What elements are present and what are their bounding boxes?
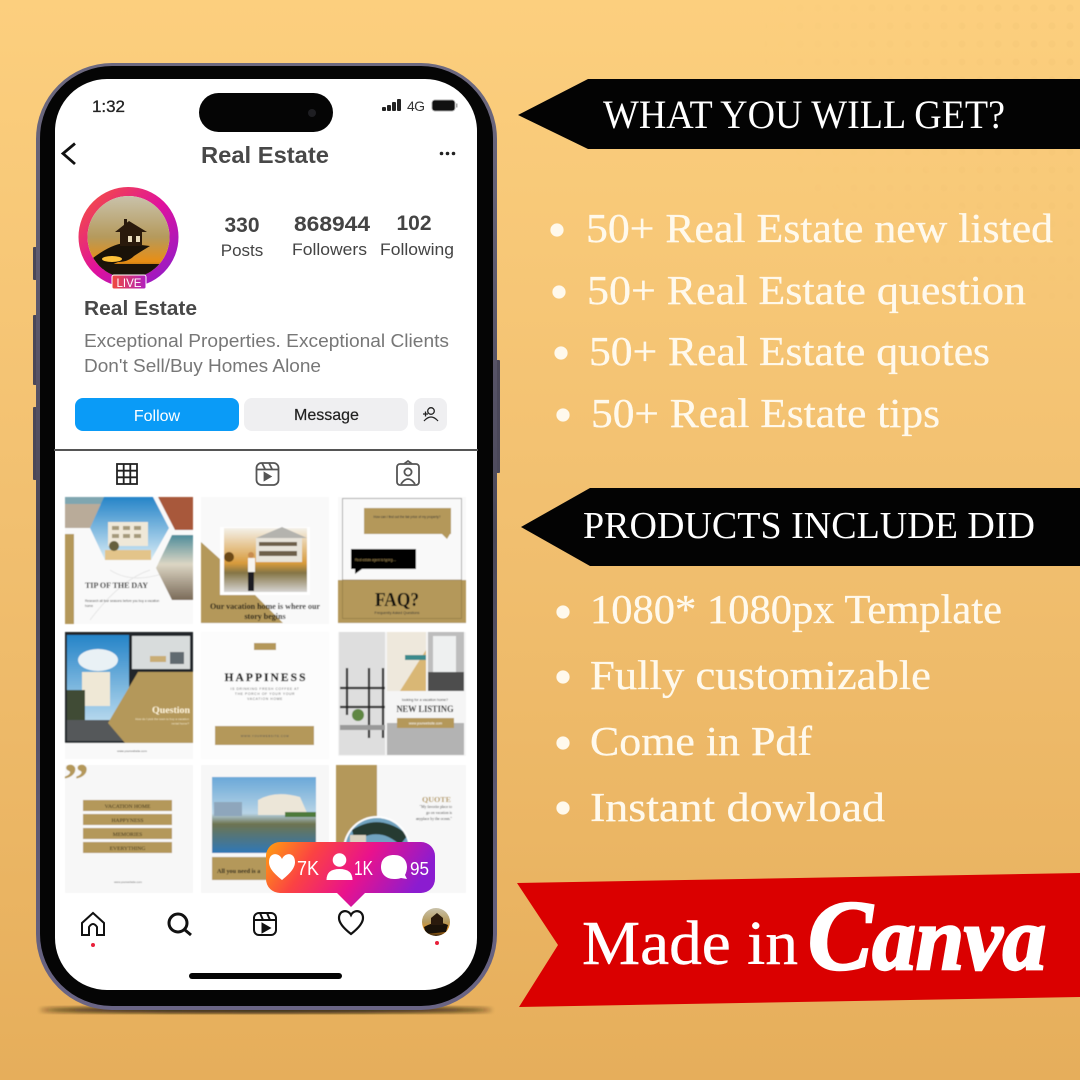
profile buttons: Message xyxy=(294,407,359,424)
post 4: question: rental home? xyxy=(171,722,189,726)
post 1: tip of the day xyxy=(65,497,193,624)
phone xyxy=(33,63,500,1014)
profile stats: 330 xyxy=(224,214,260,237)
post 2: vacation home xyxy=(201,497,329,624)
post 1: tip of the day: home xyxy=(85,604,93,608)
profile stats: Following xyxy=(380,240,454,259)
profile buttons: Follow xyxy=(134,408,181,425)
banner: what you will get: WHAT YOU WILL GET? xyxy=(603,92,1005,137)
banner: products include xyxy=(521,488,1080,566)
profile header: Real Estate xyxy=(201,142,329,168)
post 3: FAQ: FAQ? xyxy=(375,589,419,611)
signal icon xyxy=(382,99,401,111)
icon: heart xyxy=(269,854,295,880)
bottom navigation xyxy=(82,908,450,947)
notification popup: 7K xyxy=(297,858,320,880)
post 5: happiness: WWW.YOURWEBSITE.COM xyxy=(241,734,289,738)
post 6: new listing: www.yourwebsite.com xyxy=(409,722,442,726)
item 4: 50+ Real Estate tips xyxy=(591,390,940,436)
ribbon: made in canva xyxy=(517,873,1080,1007)
icon: reels xyxy=(254,913,276,935)
dynamic island xyxy=(199,93,333,132)
profile buttons xyxy=(75,398,447,431)
tab icons xyxy=(117,461,419,485)
post 3: FAQ: Real estate agent is typing.... xyxy=(355,558,396,562)
post 7: quote list: HAPPYNESS xyxy=(111,818,144,824)
post 3: FAQ: How can I find out the fair price of my property? xyxy=(374,515,441,519)
more dots xyxy=(440,152,455,155)
post 5: happiness: THE PORCH OF YOUR YOUR xyxy=(235,692,295,696)
post 6: new listing: looking for a vacation home? xyxy=(402,698,448,702)
post 3: FAQ xyxy=(338,497,466,624)
avatar: LIVE xyxy=(116,276,142,290)
post 7: quote list xyxy=(63,754,193,893)
icon: grid xyxy=(117,464,137,484)
back arrow xyxy=(63,144,75,164)
item 3: 50+ Real Estate quotes xyxy=(589,328,990,374)
post 4: question: www.yourwebsite.com xyxy=(117,749,147,753)
notification popup: 1K xyxy=(354,858,374,880)
post 9: quote photo: "My favorite place to xyxy=(420,805,452,809)
list: products include xyxy=(556,586,1002,830)
post 2: vacation home: story begins xyxy=(244,612,286,621)
post 8: lake house: All you need is a xyxy=(217,868,260,875)
battery icon xyxy=(432,100,458,111)
profile bio xyxy=(84,297,449,376)
post 9: quote photo: go on vacation is xyxy=(426,811,453,815)
phone screen xyxy=(55,79,477,990)
post 3: FAQ: Frequently Asked Questions xyxy=(375,611,420,615)
profile stats xyxy=(221,212,454,260)
profile bio: Real Estate xyxy=(84,297,197,320)
home indicator xyxy=(189,973,342,979)
ribbon: made in canva: Canva xyxy=(808,880,1046,991)
avatar xyxy=(83,192,175,290)
add person icon xyxy=(423,408,438,421)
profile thumbnail xyxy=(422,908,450,945)
post 4: question xyxy=(65,632,193,759)
post grid xyxy=(63,497,466,893)
item 2: Fully customizable xyxy=(590,652,931,698)
phone bezel xyxy=(40,66,493,1006)
post 8: lake house xyxy=(201,765,329,893)
ribbon: made in canva: Made in xyxy=(582,910,798,978)
status bar xyxy=(92,93,458,132)
post 7: quote list: ” xyxy=(63,754,89,805)
house on hand xyxy=(93,243,150,270)
profile stats: 102 xyxy=(396,212,432,235)
post 6: new listing xyxy=(338,632,466,756)
profile stats: Posts xyxy=(221,241,263,260)
phone side buttons xyxy=(33,247,500,480)
profile stats: 868944 xyxy=(294,213,370,236)
icon: home xyxy=(82,913,104,947)
banner: products include: PRODUCTS INCLUDE DID xyxy=(583,505,1035,547)
post 5: happiness: HAPPINESS xyxy=(224,672,306,684)
item 2: 50+ Real Estate question xyxy=(587,267,1026,313)
divider xyxy=(54,449,478,451)
profile header xyxy=(63,142,455,168)
post 1: tip of the day: Research all four seasons before you buy a vacation xyxy=(85,599,159,603)
post 4: question: Question xyxy=(152,706,191,716)
icon: heart outline xyxy=(339,911,363,934)
post 7: quote list: EVERYTHING xyxy=(110,846,145,852)
post 1: tip of the day: TIP OF THE DAY xyxy=(85,581,148,590)
phone frame xyxy=(36,63,497,1010)
post 9: quote photo: QUOTE xyxy=(422,796,451,804)
item 3: Come in Pdf xyxy=(590,718,812,764)
post 7: quote list: MEMORIES xyxy=(113,832,142,838)
post 2: vacation home: Our vacation home is where our xyxy=(210,602,320,611)
notification popup: 95 xyxy=(410,859,429,879)
post 5: happiness: IS DRINKING FRESH COFFEE AT xyxy=(231,687,299,691)
post 4: question: How do I pick the town to buy a vacation xyxy=(135,717,189,721)
icon: reels xyxy=(256,463,278,485)
post 6: new listing: NEW LISTING xyxy=(396,704,454,714)
icon: search xyxy=(169,914,191,935)
icon: tagged person xyxy=(397,461,419,485)
live badge xyxy=(112,275,146,289)
icon: person xyxy=(326,853,352,880)
item 1: 50+ Real Estate new listed xyxy=(586,205,1053,251)
post 5: happiness: VACATION HOME xyxy=(247,697,283,701)
post 9: quote photo: anyplace by the ocean." xyxy=(416,817,452,821)
list: what you will get xyxy=(550,205,1053,436)
profile bio: Exceptional Properties. Exceptional Clients xyxy=(84,331,449,351)
phone shadow xyxy=(40,1006,492,1014)
item 4: Instant dowload xyxy=(590,784,885,830)
post 9: quote photo xyxy=(335,764,453,842)
icon: speech bubble xyxy=(381,855,407,879)
post 7: quote list: VACATION HOME xyxy=(105,804,151,810)
status bar: 1:32 xyxy=(92,97,125,116)
notification popup xyxy=(266,842,435,907)
banner: what you will get xyxy=(518,79,1080,149)
post 7: quote list: www.yourwebsite.com xyxy=(114,880,143,884)
status bar: 4G xyxy=(407,98,425,114)
post 5: happiness xyxy=(201,632,329,759)
profile stats: Followers xyxy=(292,240,367,259)
profile bio: Don't Sell/Buy Homes Alone xyxy=(84,356,321,376)
item 1: 1080* 1080px Template xyxy=(590,586,1002,632)
